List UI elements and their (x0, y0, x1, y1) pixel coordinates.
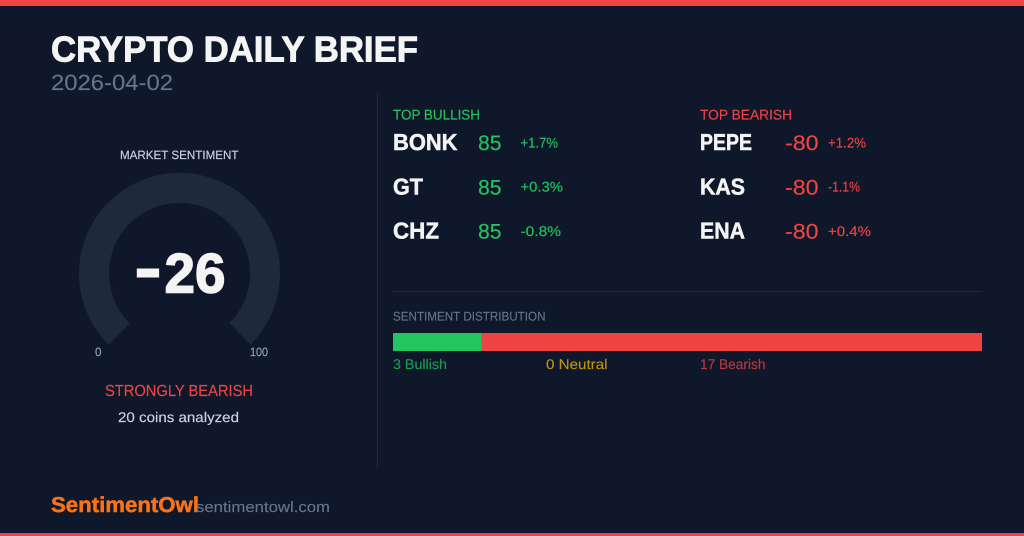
gauge minimum label: 0 (95, 345, 102, 359)
coin row: ENA: -80 (785, 220, 818, 244)
date: 2026-04-02 (51, 70, 173, 95)
bullish heading: TOP BULLISH (393, 106, 480, 122)
brand name: SentimentOwl (51, 493, 199, 517)
coin row: ENA: ENA (700, 218, 745, 244)
coin row: BONK: BONK (393, 129, 458, 155)
website: sentimentowl.com (196, 499, 330, 516)
gauge value (136, 236, 226, 304)
gauge value: 26 (164, 242, 226, 304)
coin row: ENA (700, 218, 871, 244)
top accent bar (0, 0, 1024, 6)
bullish count: 3 Bullish (393, 356, 447, 372)
bearish count: 17 Bearish (700, 356, 766, 372)
coin row: PEPE: +1.2% (828, 134, 866, 150)
bearish heading: TOP BEARISH (700, 106, 792, 122)
coin row: BONK: +1.7% (520, 134, 558, 150)
coin row: CHZ: 85 (478, 220, 502, 244)
panel: top bullish (393, 106, 563, 244)
neutral count: 0 Neutral (546, 356, 608, 372)
coin row: CHZ: -0.8% (520, 223, 561, 239)
coins analyzed: 20 coins analyzed (118, 409, 239, 425)
coin row: CHZ: CHZ (393, 218, 439, 244)
coin row: KAS: -80 (785, 176, 818, 200)
panel: top bearish (700, 106, 871, 244)
sentiment verdict: STRONGLY BEARISH (105, 383, 253, 400)
coin row: KAS: KAS (700, 174, 745, 200)
coin row: GT: +0.3% (520, 178, 563, 194)
distribution bar (393, 333, 982, 351)
coin row: GT: GT (393, 174, 423, 200)
coin row: BONK: 85 (478, 132, 502, 155)
coin row: PEPE (700, 129, 866, 155)
coin row: PEPE: -80 (785, 132, 818, 155)
coin row: BONK (393, 129, 558, 155)
coin row: ENA: +0.4% (828, 223, 871, 239)
gauge maximum label: 100 (250, 345, 268, 359)
gauge value: - (136, 236, 160, 300)
coin row: CHZ (393, 218, 561, 244)
distribution heading: SENTIMENT DISTRIBUTION (393, 310, 546, 324)
coin row: GT: 85 (478, 176, 502, 200)
title: CRYPTO DAILY BRIEF (51, 28, 418, 70)
bottom accent bar (0, 533, 1024, 536)
coin row: PEPE: PEPE (700, 129, 752, 155)
coin row: KAS (700, 174, 860, 200)
gauge heading: MARKET SENTIMENT (120, 148, 239, 162)
gauge arc (94, 188, 265, 334)
footer (51, 493, 330, 517)
panel: market sentiment gauge (94, 148, 268, 425)
coin row: GT (393, 174, 563, 200)
panel: sentiment distribution (393, 310, 982, 372)
coin row: KAS: -1.1% (828, 178, 860, 194)
